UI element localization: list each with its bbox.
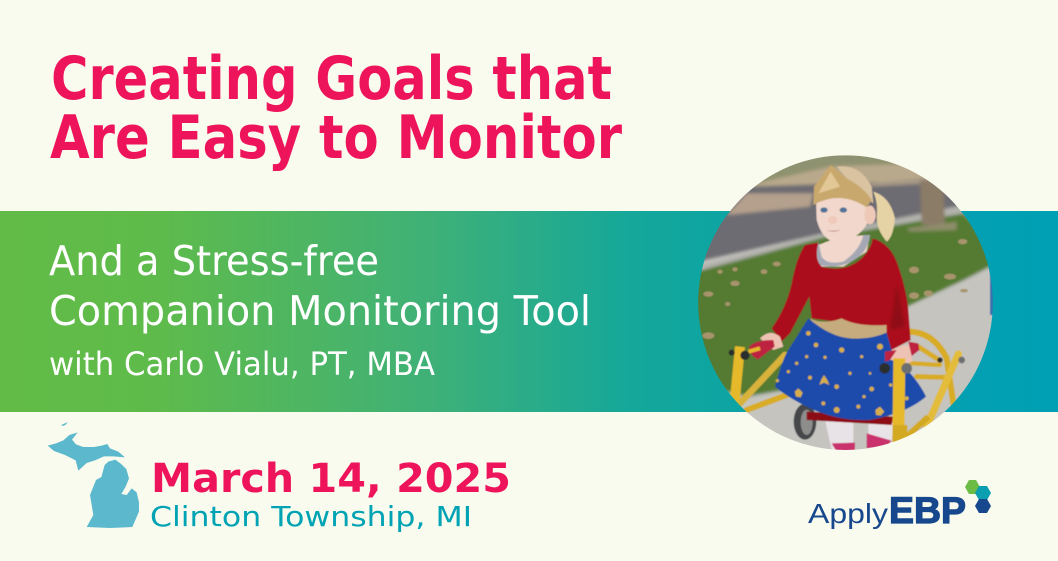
photo: child in costume with walker — [690, 150, 1000, 460]
logo: ApplyEBP: EBP — [889, 490, 966, 531]
icon: Michigan state map — [48, 422, 139, 528]
red velvet top and sleeves — [772, 238, 911, 353]
subtitle text block: with Carlo Vialu, PT, MBA — [49, 345, 435, 383]
face — [816, 196, 869, 242]
rear wheel — [794, 404, 816, 440]
legs — [825, 420, 853, 450]
event date: March 14, 2025 — [151, 456, 511, 502]
fallen leaves — [702, 239, 968, 339]
subtitle text block — [49, 237, 591, 383]
subtitle text block: And a Stress-free — [49, 237, 379, 285]
subtitle text block: Companion Monitoring Tool — [49, 287, 591, 335]
hair ponytail — [873, 192, 895, 242]
gradient band — [0, 211, 1058, 412]
gold crown — [813, 165, 872, 207]
title: Creating Goals that — [51, 44, 612, 114]
blue star skirt — [775, 318, 926, 420]
gold waistband — [810, 318, 887, 339]
hands and grips — [760, 333, 783, 350]
logo: ApplyEBP — [808, 480, 991, 531]
event location: Clinton Township, MI — [150, 500, 472, 533]
title — [50, 44, 622, 173]
walker back frame — [740, 332, 958, 427]
title: Are Easy to Monitor — [50, 103, 622, 173]
logo: ApplyEBP: Apply — [808, 498, 888, 529]
walker front frame — [735, 347, 899, 440]
neck and collar — [818, 235, 870, 267]
